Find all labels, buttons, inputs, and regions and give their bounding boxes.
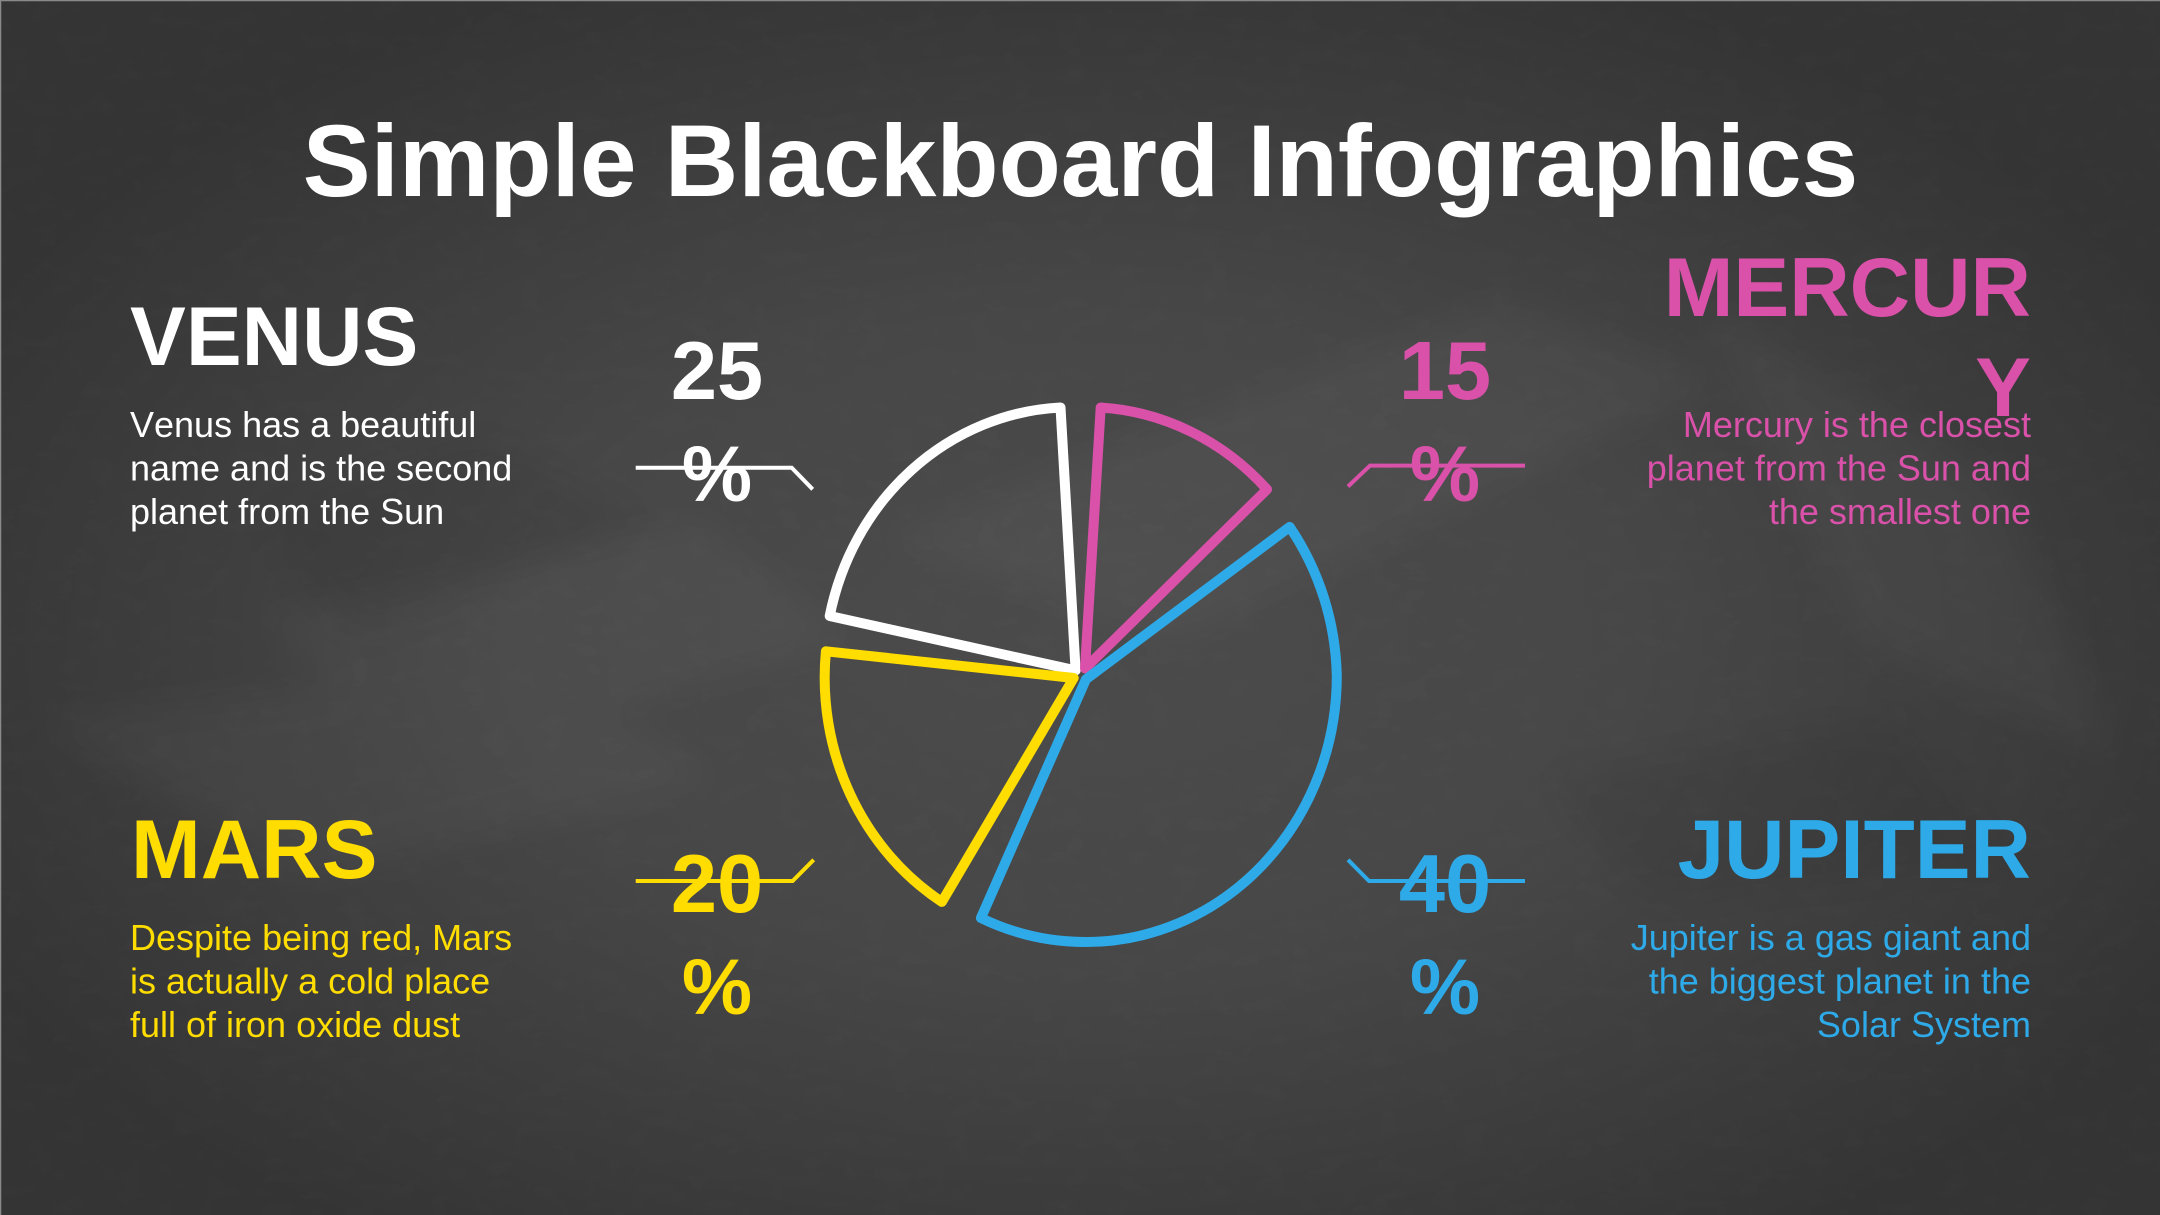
- heading: Mercury: Y: [1975, 340, 2031, 434]
- value: 25%: %: [682, 429, 752, 518]
- heading: Mercury: MERCUR: [1664, 240, 2031, 334]
- title: Simple Blackboard Infographics: [303, 104, 1858, 218]
- callout: Jupiter 40%: [1348, 837, 1525, 1031]
- leader line: Venus: [636, 468, 813, 489]
- value: 20%: 20: [671, 837, 763, 930]
- heading: Mars: MARS: [131, 802, 377, 896]
- value: 40%: %: [1410, 942, 1480, 1031]
- text block: Mercury description: planet from the Sun and: [1647, 447, 2031, 488]
- slice: Mercury 15%: [1085, 408, 1267, 668]
- heading: Jupiter: JUPITER: [1678, 802, 2031, 896]
- text block: Mars description: full of iron oxide dust: [130, 1004, 460, 1045]
- value: 40%: 40: [1399, 837, 1491, 930]
- heading: Venus: VENUS: [130, 289, 418, 383]
- callout: Mars 20%: [636, 837, 814, 1031]
- value: 20%: %: [682, 942, 752, 1031]
- callout: Venus 25%: [636, 324, 813, 518]
- callout: Mercury 15%: [1348, 324, 1525, 518]
- panel: Mercury: [1647, 240, 2031, 532]
- leader line: Jupiter: [1348, 860, 1525, 881]
- text block: Mars description: Despite being red, Mars: [130, 917, 512, 958]
- text block: Jupiter description: Jupiter is a gas giant and: [1631, 917, 2031, 958]
- text block: Venus description: Venus has a beautiful: [130, 404, 476, 445]
- text block: Mars description: is actually a cold place: [130, 960, 490, 1001]
- leader line: Mars: [636, 860, 814, 881]
- slice: Mars 20%: [825, 651, 1074, 902]
- leader line: Mercury: [1348, 466, 1525, 486]
- slice: Jupiter 40%: [981, 527, 1337, 942]
- text block: Venus description: name and is the second: [130, 447, 512, 488]
- panel: Jupiter: [1631, 802, 2031, 1045]
- text block: Mercury description: Mercury is the closest: [1683, 404, 2031, 445]
- text block: Jupiter description: the biggest planet in the: [1649, 960, 2031, 1001]
- slice: Venus 25%: [830, 408, 1076, 670]
- value: 25%: 25: [671, 324, 763, 417]
- text block: Jupiter description: Solar System: [1817, 1004, 2031, 1045]
- value: 15%: 15: [1399, 324, 1491, 417]
- panel: Mars: [130, 802, 512, 1045]
- text block: Mercury description: the smallest one: [1769, 491, 2031, 532]
- text block: Venus description: planet from the Sun: [130, 491, 444, 532]
- panel: Venus: [130, 289, 512, 532]
- value: 15%: %: [1410, 429, 1480, 518]
- pie chart: [825, 408, 1337, 942]
